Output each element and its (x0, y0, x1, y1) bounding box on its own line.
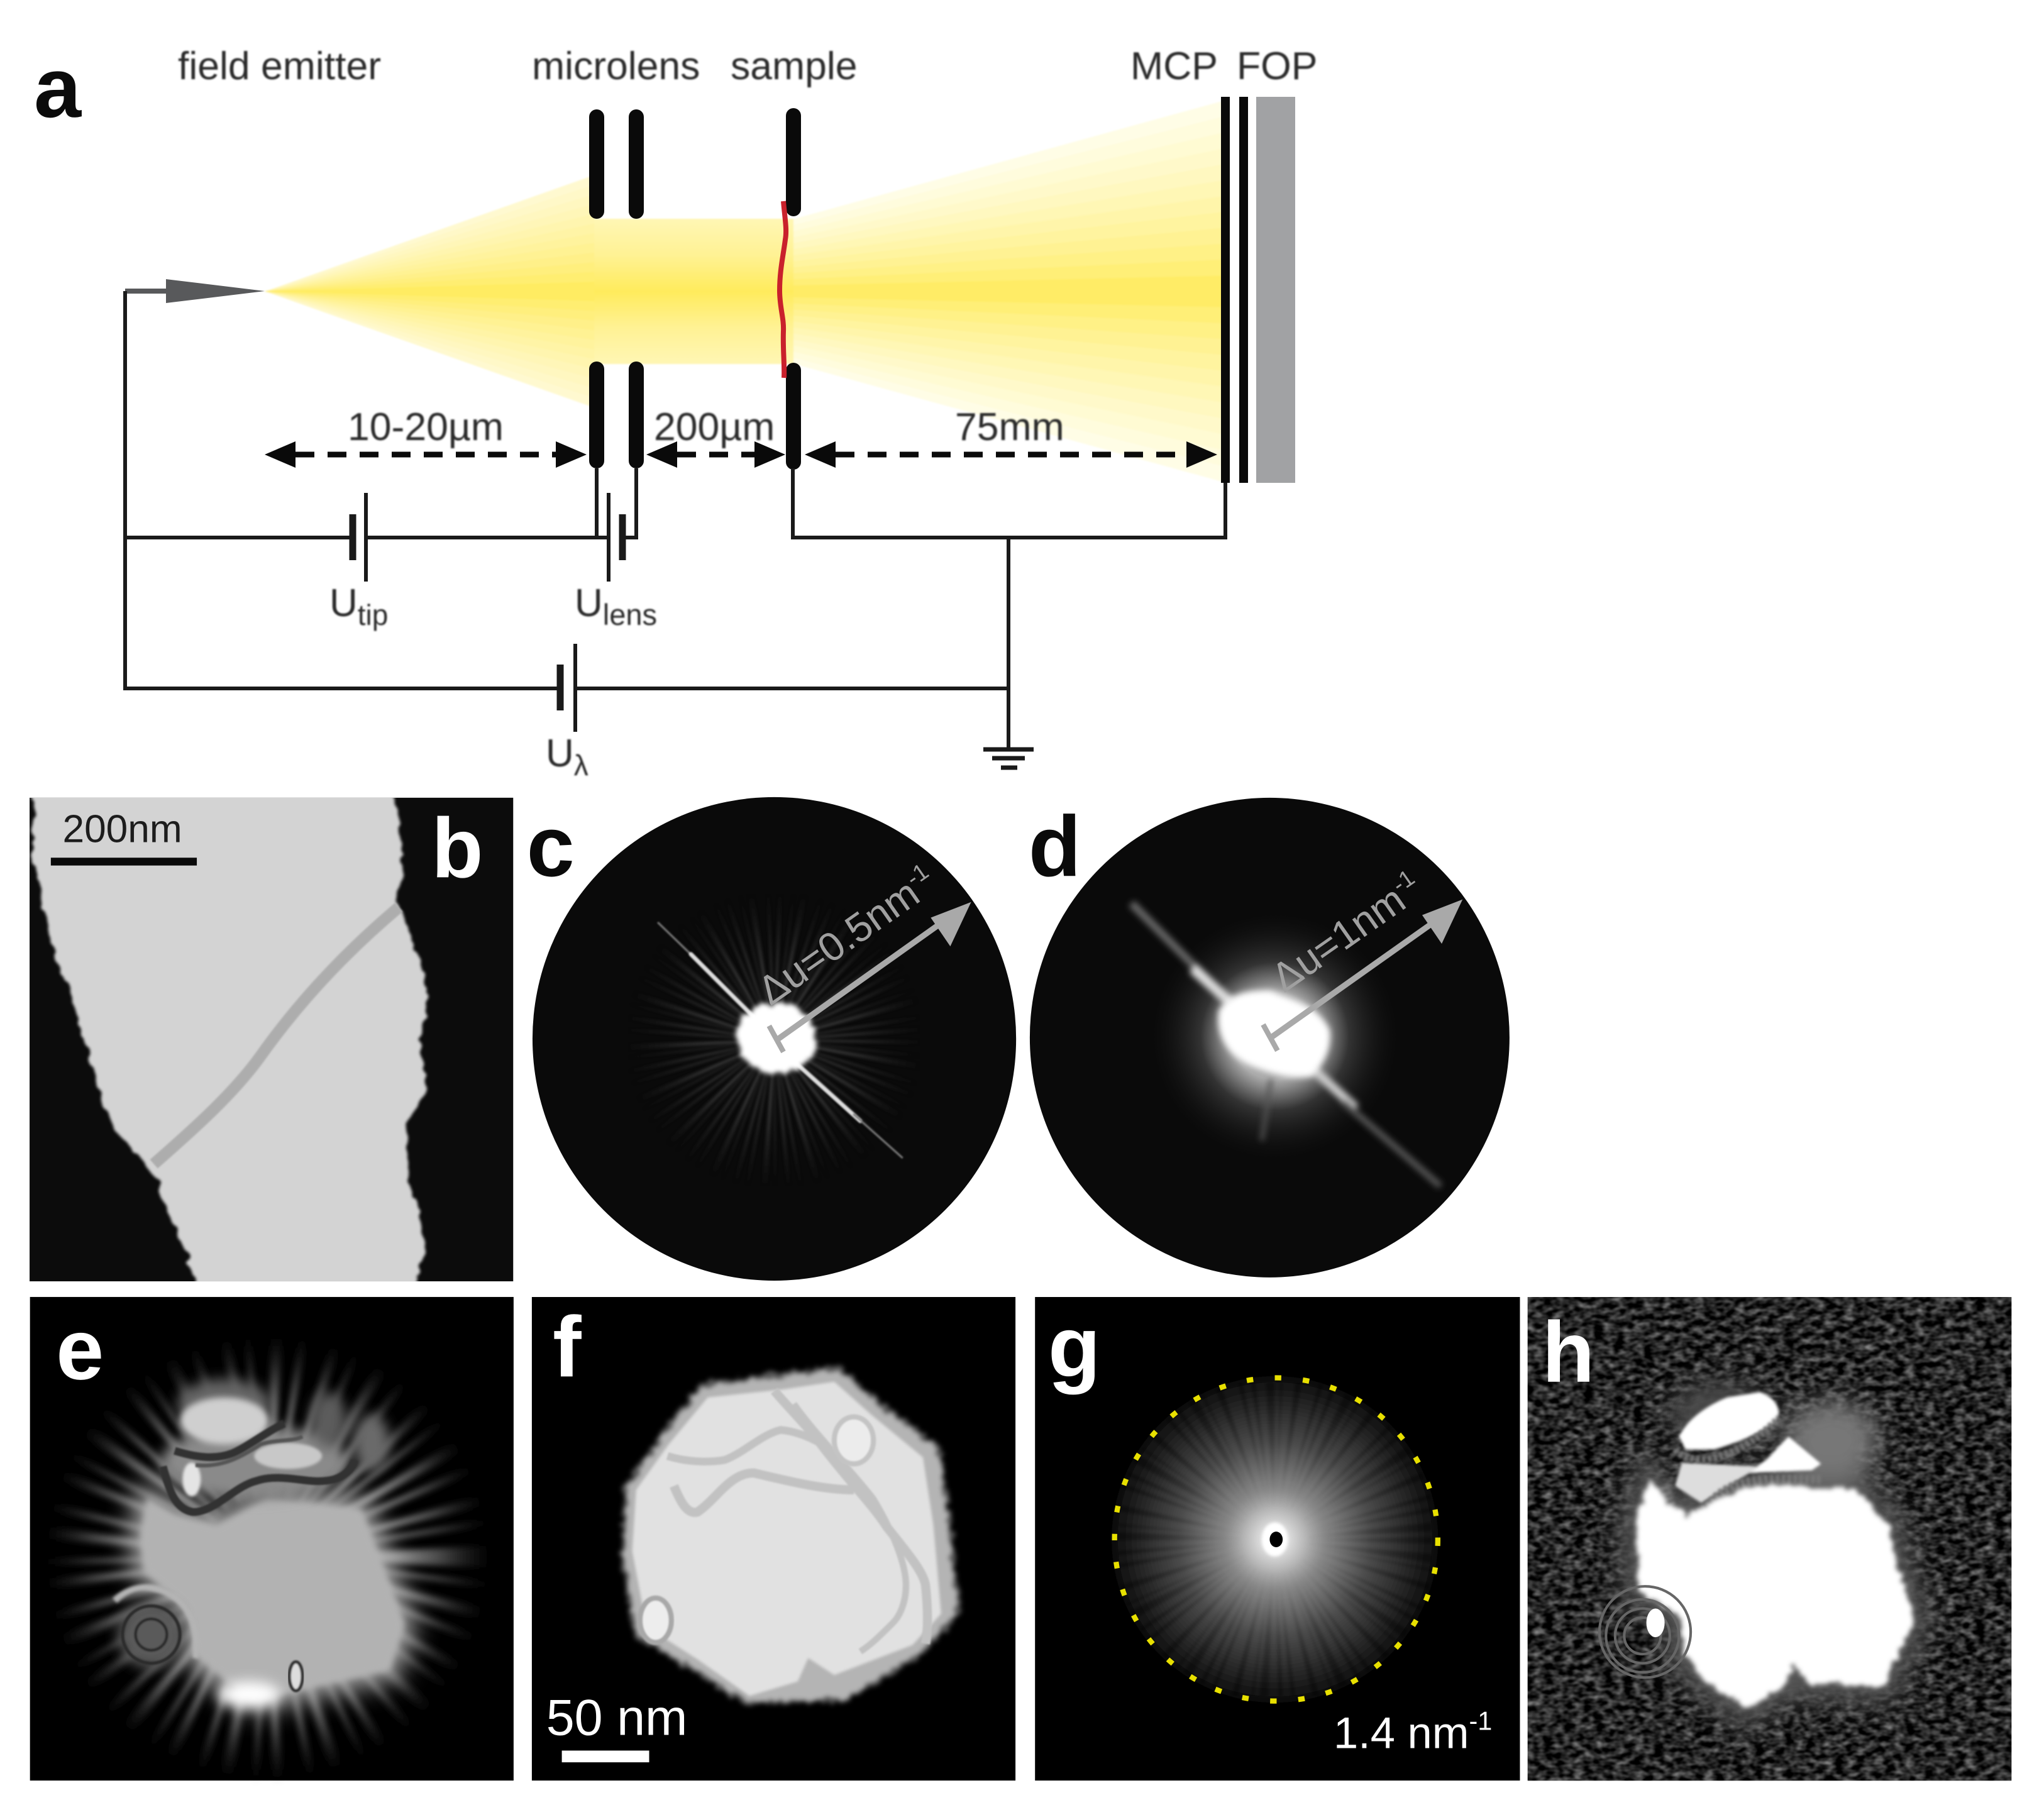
panel c: hologram with 0.5 per nm bandwidth (527, 797, 1016, 1281)
panel label c: c (527, 798, 575, 894)
panel f: reconstruction amplitude (532, 1297, 1015, 1780)
bandwidth label: -1 (1469, 1706, 1492, 1735)
voltage labels (329, 582, 657, 781)
panel g: Fourier transform of hologram (1035, 1297, 1520, 1780)
panel a: electron holography schematic (34, 40, 1317, 781)
bandwidth label: 1.4 nm (1334, 1708, 1469, 1757)
diagram labels: MCP (1130, 44, 1218, 88)
panel label h: h (1542, 1304, 1594, 1400)
sample electrodes (786, 108, 801, 470)
field emitter tip (125, 279, 265, 303)
fibre loop upper (834, 1417, 873, 1464)
grey halo (1636, 1381, 1915, 1710)
panel label b: b (431, 800, 483, 895)
MCP plates (1221, 97, 1248, 483)
dark fibre bands (163, 1423, 355, 1512)
voltage labels: tip (358, 599, 388, 631)
bandwidth arrow (1263, 900, 1462, 1051)
diffraction streak (1132, 903, 1440, 1186)
hole area (33, 769, 430, 1303)
bandwidth text: -1 (1387, 864, 1419, 898)
battery U tip (353, 493, 366, 582)
ground symbol (983, 749, 1034, 768)
voltage labels: U (575, 582, 603, 625)
voltage labels: U (329, 582, 358, 625)
nanotube filament (154, 907, 399, 1164)
bright fringes (182, 1443, 322, 1496)
yellow dashed circle (1115, 1377, 1438, 1701)
white hologram body (1636, 1479, 1915, 1710)
radial fringes (124, 1415, 411, 1701)
dimension arrows (265, 441, 1217, 468)
panel label g: g (1048, 1298, 1101, 1394)
diagram labels: microlens (532, 44, 700, 88)
panel label a: a (34, 40, 82, 135)
panel e: raw hologram (30, 1297, 514, 1780)
membrane interior (633, 1382, 941, 1696)
panel label e: e (56, 1301, 104, 1398)
panel label d: d (1029, 798, 1081, 894)
panel b: TEM image of nanotube across a hole (30, 769, 513, 1303)
dimension 10-20um (265, 441, 587, 468)
upper white lobes (1675, 1392, 1821, 1503)
sample membrane (780, 201, 786, 378)
dimension labels: 10-20µm (348, 405, 504, 449)
central bright lobe (1218, 991, 1330, 1078)
dimension 200um (646, 441, 785, 468)
bandwidth text: Δu=0.5nm (749, 870, 927, 1013)
circuit wiring (125, 291, 1225, 749)
bandwidth arrow (769, 902, 971, 1052)
upper lobe (180, 1398, 268, 1444)
voltage labels: lens (603, 598, 657, 631)
FOP plate (1256, 97, 1295, 483)
central spot (737, 1003, 817, 1074)
panel h: amplified hologram (1528, 1297, 2011, 1780)
panel label f: f (553, 1298, 582, 1394)
halo (141, 1498, 404, 1701)
small loop (289, 1662, 302, 1691)
diffraction streak (658, 923, 902, 1157)
fibres (668, 1391, 927, 1652)
diagram labels: FOP (1237, 44, 1317, 88)
fibre loop lower (640, 1598, 671, 1642)
diagram labels: sample (731, 44, 857, 88)
scale bar 50 nm: 50 nm (546, 1690, 687, 1747)
glow (1151, 912, 1399, 1160)
bandwidth text: -1 (901, 858, 933, 891)
electron beam (265, 101, 1223, 482)
scale bar 200nm: 200nm (63, 807, 182, 851)
diagram labels (178, 44, 1317, 88)
battery U lambda (560, 644, 575, 732)
dimension labels: 200µm (654, 405, 775, 449)
bandwidth text: Δu=1nm (1263, 876, 1413, 1000)
hologram body (141, 1498, 404, 1701)
microlens electrodes (589, 109, 644, 468)
voltage labels: U (546, 732, 574, 775)
voltage labels: λ (574, 749, 588, 781)
fibre outlines (1665, 1418, 1822, 1517)
noise texture (1528, 1297, 2011, 1780)
scale bar 200nm (51, 807, 197, 866)
diffraction rays (683, 949, 866, 1132)
radial intensity (1112, 1376, 1438, 1703)
bottom bright rim (218, 1682, 280, 1708)
radial streaks (1177, 1442, 1373, 1637)
dimension labels: 75mm (955, 405, 1064, 449)
outer rim (622, 1367, 959, 1704)
diagram labels: field emitter (178, 44, 381, 88)
fibre spiral (1599, 1586, 1691, 1677)
spiral fibre (114, 1587, 197, 1669)
panel d: hologram with 1 per nm bandwidth (1029, 798, 1510, 1278)
dimension 75mm (805, 441, 1217, 468)
central hot spot (1262, 1523, 1288, 1557)
upper smear (160, 1379, 390, 1499)
battery U lens (609, 493, 622, 582)
dimension labels (348, 405, 1064, 449)
